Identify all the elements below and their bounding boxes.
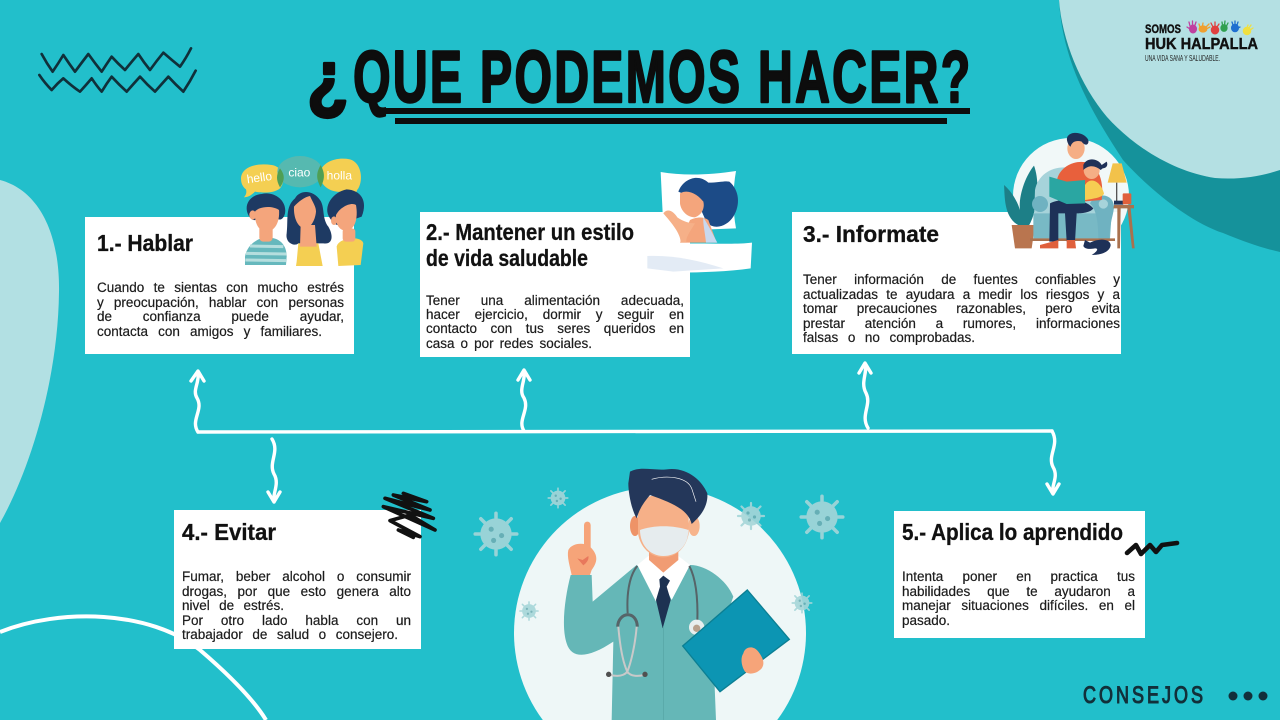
text block: 4: drogas, por que esto genera alto: [182, 584, 411, 598]
label: consejos: [1083, 683, 1268, 709]
text block: 2: casa o por redes sociales.: [426, 336, 592, 351]
icon: sleeping woman: [647, 171, 752, 272]
dark corner wave: [1059, 0, 1280, 252]
child: [1085, 180, 1104, 200]
logo: Somos Huk Halpalla: UNA VIDA SANA Y SALUDABLE.: [1145, 54, 1220, 63]
heading: 2: 2.- Mantener un estilo: [426, 219, 634, 245]
speech bubbles: holla: [327, 168, 352, 182]
text block: 1: y preocupación, hablar con personas: [97, 295, 344, 310]
cat: [1083, 240, 1111, 255]
text block: 3: [803, 272, 1120, 345]
left blob: [0, 180, 59, 523]
icons: virus particles: [475, 488, 843, 620]
face: [680, 192, 704, 217]
panel: 4 Evitar: [174, 510, 421, 649]
text block: 3: falsas o no comprobadas.: [803, 330, 975, 345]
text block: 2: [426, 293, 684, 351]
text block: 4: [182, 569, 411, 642]
dad: [1057, 162, 1102, 203]
logo: Somos Huk Halpalla: SOMOS: [1145, 22, 1181, 36]
light corner blob: [1059, 0, 1280, 179]
panel: 3 Informate: [792, 212, 1121, 354]
heading: 4: 4.- Evitar: [182, 519, 276, 545]
text block: 5: [902, 569, 1135, 628]
heading: 5: 5.- Aplica lo aprendido: [902, 519, 1123, 545]
text block: 1: contacta con amigos y familiares.: [97, 324, 322, 339]
icon: family reading: [1004, 132, 1135, 255]
title: ¿: [307, 35, 348, 121]
text block: 3: prestar atención a rumores, informaciones: [803, 316, 1120, 330]
speech bubbles: hello: [246, 169, 273, 186]
person right: [327, 189, 364, 266]
bedding: [647, 243, 752, 272]
speech bubbles: ciao: [288, 166, 311, 180]
sofa: [1033, 167, 1110, 238]
heading: 2: de vida saludable: [426, 245, 588, 271]
text block: 2: hacer ejercicio, dormir y seguir en: [426, 307, 684, 322]
plant: [1004, 166, 1037, 248]
hair: [678, 178, 738, 227]
pillow: [661, 171, 736, 229]
icon: scribble card 5: [1127, 543, 1177, 554]
text block: 5: pasado.: [902, 613, 950, 628]
text block: 3: actualizadas te ayudara a medir los riesgos y a: [803, 286, 1120, 302]
text block: 4: Por otro lado habla con un: [182, 612, 411, 628]
text block: 1: [97, 280, 344, 339]
text block: 5: manejar situaciones difíciles. en el: [902, 598, 1135, 613]
text block: 3: Tener información de fuentes confiables y: [803, 272, 1120, 287]
panel: 5 Aplica lo aprendido: [894, 511, 1145, 638]
text block: 4: trabajador de salud o consejero.: [182, 627, 398, 642]
logo: Somos Huk Halpalla: [1145, 20, 1258, 63]
panel: 1 Hablar: [85, 217, 354, 354]
icon: zigzag decoration: [39, 48, 196, 92]
white circle: [514, 487, 806, 720]
person left: [245, 193, 287, 265]
text block: 4: nivel de estrés.: [182, 598, 284, 613]
torso: [680, 217, 717, 243]
text block: 3: tomar precauciones razonables, pero evita: [803, 301, 1120, 316]
logo: Somos Huk Halpalla: HUK HALPALLA: [1145, 36, 1258, 53]
label: consejos: CONSEJOS: [1083, 683, 1203, 709]
heading: 1: 1.- Hablar: [97, 230, 193, 256]
icon: colored hands: [1187, 21, 1253, 35]
speech bubbles: [241, 156, 361, 202]
text block: 2: Tener una alimentación adecuada,: [426, 293, 684, 308]
heading: 3: 3.- Informate: [803, 221, 939, 247]
doctor figure: [564, 469, 789, 720]
text block: 5: habilidades que te ayudaron a: [902, 584, 1135, 599]
icon: people speaking: [241, 156, 364, 266]
arm and hand: [663, 211, 695, 243]
text block: 4: Fumar, beber alcohol o consumir: [182, 569, 411, 584]
text block: 5: Intenta poner en practica tus: [902, 569, 1135, 584]
book: [1049, 177, 1085, 204]
text block: 1: Cuando te sientas con mucho estrés: [97, 280, 344, 295]
text block: 2: contacto con tus seres queridos en: [426, 321, 684, 336]
side table and lamp: [1113, 205, 1135, 248]
white circle behind family: [1013, 138, 1129, 226]
bottom-left white curve: [0, 616, 266, 720]
text block: 1: de confianza puede ayudar,: [97, 309, 344, 324]
person center: [286, 192, 332, 266]
title: QUE PODEMOS HACER?: [353, 37, 970, 119]
panel: 2 Estilo de vida: [420, 212, 690, 357]
heading: 2: [426, 219, 634, 271]
